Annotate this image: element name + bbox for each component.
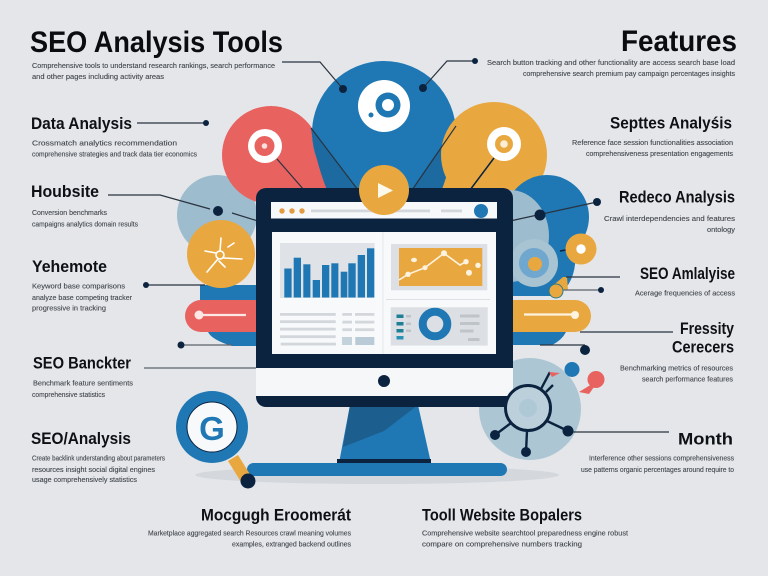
text block: Tooll Website Bopalers: Tooll Website Bopalers xyxy=(422,506,582,524)
text block: SEO Banckter: comprehensive statistics xyxy=(32,390,105,399)
screen xyxy=(272,232,496,354)
bubble: coral left xyxy=(222,106,330,204)
text block: Fressity Cerecers xyxy=(620,319,734,384)
screen dividers xyxy=(382,232,384,354)
text block: Yehemote: Yehemote xyxy=(32,257,107,276)
node network graphic xyxy=(490,362,604,457)
text block: Septtes Analysis: Septtes Analyśis xyxy=(610,114,732,132)
text block: Septtes Analysis: comprehensiveness presentation engagements xyxy=(586,149,733,158)
monitor stand xyxy=(337,405,431,464)
text block: SEO Amlalyise: Acerage frequencies of access xyxy=(635,288,735,298)
text block: Data Analysis xyxy=(31,114,197,158)
text block: Septtes Analysis: Reference face session functionalities association xyxy=(572,138,733,147)
text block: Yehemote: Keyword base comparisons xyxy=(32,282,125,290)
text block: Month: Month xyxy=(678,430,733,448)
text block: Month: use patterns organic percentages around require to xyxy=(581,465,734,474)
text block: Redeco Analysis: ontology xyxy=(707,225,735,234)
text block: Redeco Analysis: Crawl interdependencies and features xyxy=(604,214,735,223)
heading: Features: Features xyxy=(621,25,737,58)
magnifying glass with G xyxy=(176,391,256,488)
text block: SEO/Analysis: SEO/Analysis xyxy=(31,429,131,448)
bubble: blue right xyxy=(505,175,589,259)
blue backing lower left xyxy=(200,285,262,346)
leader lines and dots xyxy=(108,58,673,432)
browser bar xyxy=(271,202,497,218)
text block: SEO Banckter: SEO Banckter xyxy=(33,354,131,372)
blue backing lower right xyxy=(505,250,575,296)
text block: Month: Interference other sessions comprehensiveness xyxy=(589,454,734,462)
text block: Yehemote: progressive in tracking xyxy=(32,304,106,312)
text block: Data Analysis: comprehensive strategies and track data tier economics xyxy=(32,150,197,158)
text block: Data Analysis: Crossmatch analytics recommendation xyxy=(32,138,177,148)
power button xyxy=(378,375,390,387)
donut panel xyxy=(391,307,488,346)
monitor xyxy=(256,188,513,407)
heading: Features: Search button tracking and other functionality are access search base load xyxy=(487,58,735,67)
play button xyxy=(359,165,409,215)
magnifying glass with G: G xyxy=(199,410,225,447)
text block: Houbsite: Houbsite xyxy=(31,182,99,201)
text block: Yehemote xyxy=(32,257,133,312)
text block: SEO/Analysis: usage comprehensively statistics xyxy=(32,475,137,484)
text block: Redeco Analysis xyxy=(604,188,735,234)
title: SEO Analysis Tools xyxy=(30,26,283,81)
text block: Tooll Website Bopalers: compare on comprehensive numbers tracking xyxy=(422,540,582,548)
pill: orange right xyxy=(505,300,591,345)
bubble: small orange right xyxy=(560,234,596,264)
heading: Features: comprehensive search premium pay campaign percentages insights xyxy=(523,69,735,78)
heading: Features xyxy=(487,25,737,78)
monitor chin xyxy=(256,368,513,396)
text lines under bar chart xyxy=(280,313,374,346)
bubble: orange right xyxy=(441,102,547,208)
text block: Houbsite: Conversion benchmarks xyxy=(32,208,107,217)
line chart xyxy=(391,244,487,290)
text block: SEO/Analysis: resources insight social digital engines xyxy=(32,465,155,474)
text block: SEO/Analysis xyxy=(31,429,165,484)
text block: Redeco Analysis: Redeco Analysis xyxy=(619,188,735,206)
text block: Month xyxy=(581,430,734,474)
bar chart xyxy=(280,243,374,298)
text block: Septtes Analysis xyxy=(572,114,733,158)
bubble: concentric target right xyxy=(510,239,558,287)
text block: Tooll Website Bopalers xyxy=(422,506,628,548)
text block: SEO Amlalyise: SEO Amlalyise xyxy=(640,264,735,283)
text block: Tooll Website Bopalers: Comprehensive website searchtool preparedness engine robust xyxy=(422,528,628,538)
text block: Mocgugh Eroomerat: Marketplace aggregated search Resources crawl meaning volumes xyxy=(148,528,351,538)
text block: Fressity Cerecers: Cerecers xyxy=(672,338,734,356)
text block: Data Analysis: Data Analysis xyxy=(31,114,132,133)
title: SEO Analysis Tools: SEO Analysis Tools xyxy=(30,26,283,59)
bubble: light blue left xyxy=(177,175,257,255)
text block: Fressity Cerecers: Fressity xyxy=(680,319,734,338)
title: SEO Analysis Tools: and other pages including activity areas xyxy=(32,72,164,81)
title: SEO Analysis Tools: Comprehensive tools to understand research rankings, search performance xyxy=(32,61,275,70)
text block: Mocgugh Eroomerat xyxy=(148,506,351,548)
monitor base xyxy=(247,463,507,476)
orange accent shape xyxy=(550,277,568,290)
text block: Fressity Cerecers: search performance features xyxy=(642,374,733,384)
text block: SEO Banckter: Benchmark feature sentiments xyxy=(33,378,133,388)
bubble: light blue right xyxy=(471,190,549,282)
text block: Yehemote: analyze base competing tracker xyxy=(32,293,133,302)
text block: Mocgugh Eroomerat: Mocgugh Eroomerát xyxy=(201,506,351,524)
bubble: big blue top xyxy=(311,61,458,205)
text block: Houbsite xyxy=(31,182,138,228)
shadow under monitor base xyxy=(195,466,559,484)
text block: SEO Amlalyise xyxy=(635,264,735,298)
leader SEO Analyse xyxy=(566,276,620,278)
bubble: orange left with icon xyxy=(187,220,255,288)
pill: coral left xyxy=(185,300,262,332)
text block: SEO Banckter xyxy=(32,354,133,399)
text block: Mocgugh Eroomerat: examples, extranged backend outlines xyxy=(232,540,351,548)
text block: Houbsite: campaigns analytics domain results xyxy=(32,220,138,228)
text block: Fressity Cerecers: Benchmarking metrics of resources xyxy=(620,364,733,372)
text block: SEO/Analysis: Create backlink understanding about parameters xyxy=(32,454,165,462)
node network backdrop xyxy=(479,358,581,460)
